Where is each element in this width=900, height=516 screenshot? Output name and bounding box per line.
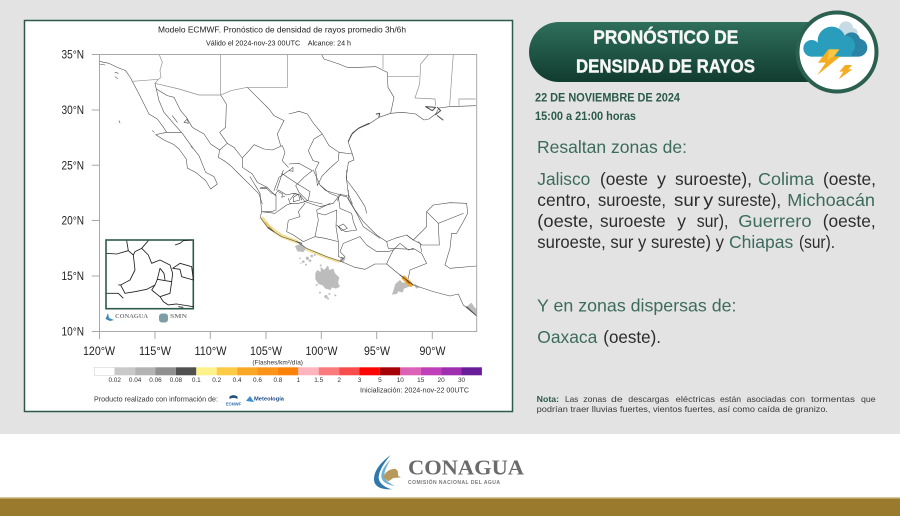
latitude axis labels: 30°N [62, 103, 84, 117]
longitude axis labels [83, 344, 446, 358]
longitude axis labels: 100°W [306, 344, 338, 358]
longitude axis labels: 95°W [364, 344, 391, 358]
text block: scattered states: Oaxaca [537, 327, 598, 347]
latitude axis labels: 35°N [62, 48, 84, 62]
small logos under inset: CONAGUA [115, 314, 149, 320]
small logos under inset [106, 313, 188, 322]
colorbar legend: 0.04 [129, 377, 142, 384]
longitude axis labels: 110°W [194, 344, 227, 358]
text block: highlighted states: y [677, 211, 686, 231]
map title: Modelo ECMWF. Pronóstico de densidad de rayos promedio 3h/6h [158, 24, 406, 34]
text block: highlighted states: sur [674, 190, 700, 210]
title banner [529, 22, 835, 82]
latitude axis labels [62, 48, 84, 338]
text block: highlighted states: y [657, 169, 666, 189]
plot frame and ticks [92, 54, 477, 339]
heading: highlighted zones: Resaltan zonas de: [537, 137, 687, 157]
ECMWF logo: ECMWF [226, 402, 241, 406]
text block: highlighted states: Jalisco [537, 169, 590, 189]
note: Nota: [537, 394, 559, 404]
text block: highlighted states: (oeste, [823, 211, 876, 231]
note: zonas [583, 394, 607, 404]
text block: highlighted states: suroeste [600, 211, 666, 231]
text block: highlighted states: Colima [758, 169, 814, 189]
text block: highlighted states: y [703, 190, 714, 210]
note: descargas [628, 394, 669, 404]
map validity subtitle: Válido el 2024-nov-23 00UTC Alcance: 24 h [206, 41, 351, 48]
colorbar legend: 0.2 [212, 377, 222, 384]
lightning density: yellow and orange coastal zones [263, 219, 411, 285]
note: con [790, 394, 805, 404]
date: 22 DE NOVIEMBRE DE 2024 [535, 91, 680, 105]
northwest outlines [99, 54, 289, 204]
initialization time: Inicialización: 2024-nov-22 00UTC [360, 388, 469, 395]
colorbar unit label: (Flashes/km²/día) [252, 360, 303, 367]
banner heading line 1: PRONÓSTICO DE [593, 26, 738, 47]
heading: scattered zones: Y en zonas dispersas de: [537, 296, 736, 316]
longitude axis labels: 90°W [420, 344, 446, 358]
northeast outlines and gulf coast [289, 54, 476, 204]
colorbar legend: 5 [378, 377, 382, 384]
colorbar legend: 3 [358, 377, 362, 384]
note: podrían traer lluvias fuertes, vientos fuertes, así como caída de granizo. [537, 404, 828, 414]
colorbar legend: 0.8 [273, 377, 283, 384]
latitude axis labels: 25°N [62, 158, 84, 172]
text block: highlighted states: (oeste, [823, 169, 876, 189]
CONAGUA subtitle: COMISIÓN NACIONAL DEL AGUA [408, 478, 500, 486]
small logos under inset: SMN [170, 314, 188, 320]
text block: scattered states: (oeste). [603, 327, 661, 347]
text block: highlighted states: (sur). [799, 232, 835, 252]
note [537, 394, 876, 414]
latitude axis labels: 20°N [62, 214, 84, 228]
note: eléctricas [676, 394, 715, 404]
text block: highlighted states: Guerrero [738, 211, 812, 231]
CONAGUA wordmark: CONAGUA [408, 455, 525, 479]
note: Las [565, 394, 578, 404]
southern Mexico and Yucatan outlines [261, 190, 477, 316]
colorbar legend: 0.1 [192, 377, 201, 384]
text block: highlighted states: centro, [537, 190, 591, 210]
text block: highlighted states: suroeste, [598, 190, 666, 210]
footer band [0, 434, 900, 516]
lightning density: gray scattered zones [295, 243, 477, 315]
CONAGUA logo [374, 455, 525, 489]
note: tormentas [811, 394, 855, 404]
colorbar legend: 20 [438, 377, 445, 384]
time range: 15:00 a 21:00 horas [535, 109, 636, 123]
colorbar legend: 1 [297, 377, 301, 384]
icon: storm cloud with lightning [798, 12, 876, 92]
note: asociadas [747, 394, 786, 404]
longitude axis labels: 115°W [139, 344, 172, 358]
colorbar legend: 0.06 [149, 377, 162, 384]
text block: highlighted states: suroeste, sur y sureste) y [537, 232, 724, 252]
note: están [720, 394, 741, 404]
text block: scattered states [537, 327, 661, 347]
colorbar legend: 10 [397, 377, 404, 384]
colorbar legend: 1.5 [314, 377, 324, 384]
longitude axis labels: 105°W [250, 344, 283, 358]
text block: highlighted states: sureste), [718, 190, 781, 210]
colorbar legend: 0.08 [170, 377, 183, 384]
text block: highlighted states: sur), [697, 211, 728, 231]
text block: highlighted states: (oeste [600, 169, 648, 189]
text block: highlighted states: Chiapas [729, 232, 794, 252]
icon: CONAGUA water and land emblem [374, 455, 401, 489]
longitude axis labels: 120°W [83, 344, 116, 358]
note: de [611, 394, 623, 404]
central Mexico state outlines [250, 170, 380, 258]
inset map [106, 240, 193, 309]
note: que [861, 394, 876, 404]
panel: map [24, 20, 512, 412]
text block: highlighted states [537, 169, 876, 252]
colorbar legend [94, 360, 482, 384]
banner heading line 2: DENSIDAD DE RAYOS [576, 57, 755, 77]
Meteologix logo [246, 396, 285, 402]
colorbar legend: 2 [337, 377, 341, 384]
colorbar legend: 15 [417, 377, 425, 384]
colorbar legend: 0.6 [253, 377, 262, 384]
colorbar legend: 0.02 [108, 377, 121, 384]
product credit: Producto realizado con información de: [94, 397, 218, 404]
latitude axis labels: 15°N [62, 269, 84, 283]
colorbar legend: 30 [458, 377, 465, 384]
latitude axis labels: 10°N [62, 324, 84, 338]
text block: highlighted states: (oeste, [537, 211, 593, 231]
ECMWF logo [226, 395, 241, 406]
text block: highlighted states: Michoacán [787, 190, 875, 210]
colorbar legend: 0.4 [233, 377, 242, 384]
Meteologix logo: Meteología [254, 396, 285, 402]
text block: highlighted states: suroeste), [675, 169, 752, 189]
chart: lightning density map [92, 54, 477, 339]
